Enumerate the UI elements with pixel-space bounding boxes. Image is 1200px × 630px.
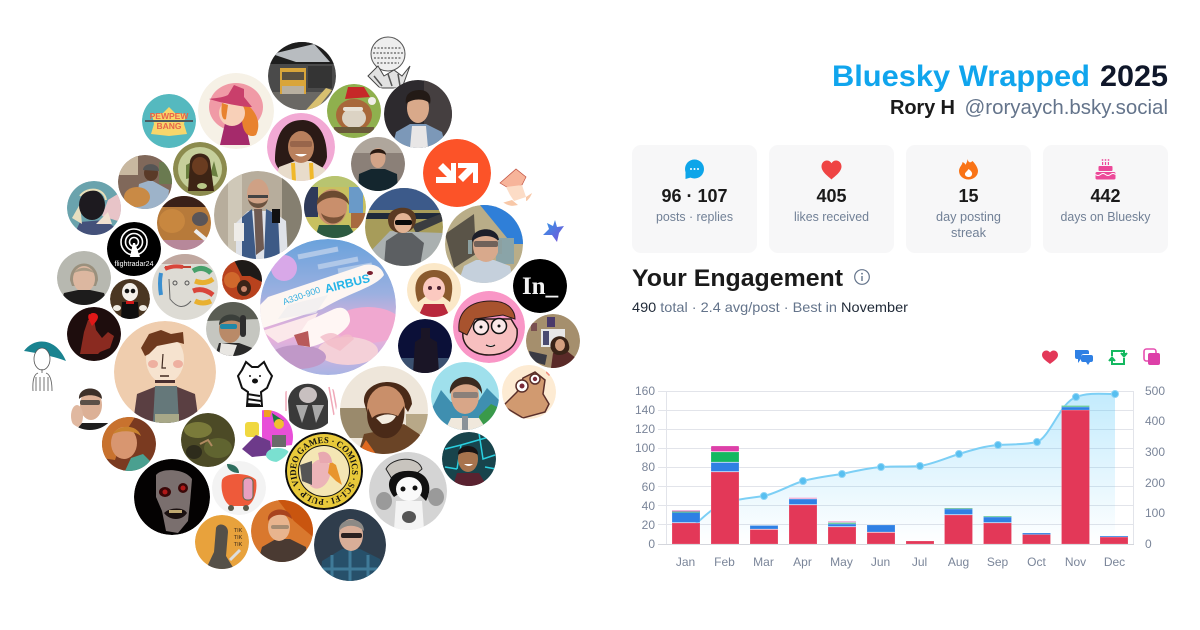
icon: birthday cake: [1096, 159, 1116, 180]
bar: Dec: [1100, 536, 1128, 544]
avatar: large Airbus plane: A330-900: [281, 285, 322, 307]
avatar: anime girl with brown curls: [407, 263, 461, 317]
avatar: smiling bearded man: [304, 176, 366, 238]
avatar: man against teal grid: [442, 432, 496, 486]
avatar: sketch with colourful candy hair: [152, 254, 218, 320]
stat card: likes received: likes received: [794, 209, 869, 224]
avatar: line art tiger: [238, 362, 272, 406]
icon: heart: [822, 160, 842, 180]
avatar: bald man in vest: [214, 171, 302, 259]
engagement summary: 490 total · 2.4 avg/post · Best in November: [632, 299, 908, 315]
avatar: orange arrows logo: [423, 139, 491, 207]
avatar: forest aerial: [181, 413, 235, 467]
avatar: blue star: [543, 220, 564, 242]
stat card: likes received: 405: [816, 186, 847, 206]
month labels: May: [830, 555, 853, 569]
avatar: pewpew bang logo: [142, 94, 196, 148]
avatar: horror face: [134, 459, 210, 535]
avatar: orange horror illustration: [195, 515, 249, 569]
avatar: red-haired illustrated man: [251, 500, 313, 562]
stat card: day posting streak: streak: [951, 225, 986, 240]
right axis labels: 0: [1145, 537, 1152, 551]
avatar: colourful pixel art: [239, 410, 293, 464]
avatar: orange horror illustration: TIK: [234, 528, 243, 534]
avatar: In_ logo: [513, 259, 567, 313]
stat card: posts and replies: 96 · 107: [661, 186, 728, 206]
bar: Jan: [672, 510, 700, 544]
bar: Jul: [906, 541, 934, 544]
month labels: Nov: [1065, 555, 1086, 569]
stat card: days on Bluesky: 442: [1090, 186, 1121, 206]
stat card: posts and replies: [632, 145, 757, 253]
avatar: mushroom-hat line figure: [24, 342, 66, 391]
avatar: blonde person: [57, 251, 111, 305]
right axis labels: [1145, 384, 1165, 551]
avatar: man with glasses and mic: [431, 362, 499, 430]
bar: Feb: [711, 446, 739, 544]
stat card: posts and replies: posts · replies: [656, 209, 733, 224]
avatar: flightradar24 logo: flightradar24: [115, 261, 154, 268]
icon: info: [855, 270, 869, 284]
cumulative line: [682, 390, 1118, 536]
avatar: yellow train at station: [268, 42, 336, 110]
month labels: Apr: [793, 555, 812, 569]
avatar: man in plaid shirt: [314, 509, 386, 581]
avatar: dark silhouette man: [398, 319, 452, 373]
avatar: apple vehicle: [212, 461, 266, 515]
avatar: pilot with blue sunglasses: [206, 302, 260, 356]
title: Bluesky Wrapped 2025: 2025: [1100, 60, 1168, 93]
left axis labels: 0: [648, 537, 655, 551]
stat card: day posting streak: 15: [958, 186, 979, 206]
avatar: pewpew bang logo: BANG: [156, 121, 182, 131]
avatar: grey manga figure: [285, 384, 337, 430]
right axis labels: 400: [1145, 414, 1165, 428]
month labels: Jul: [912, 555, 927, 569]
left axis labels: 60: [642, 480, 655, 494]
icon: reposts arrows: [1109, 351, 1127, 364]
avatar: pink-eyed creature: [502, 365, 556, 419]
avatar: large Airbus plane: AIRBUS: [323, 271, 371, 296]
avatar: red dog with heart: [67, 307, 121, 361]
avatar: man in cockpit: [445, 205, 523, 283]
avatar: man outdoors: [351, 137, 405, 191]
stat card: likes received: [769, 145, 894, 253]
avatar: flightradar24 logo: [107, 222, 161, 276]
left axis labels: 160: [635, 384, 655, 398]
bar: Sep: [984, 516, 1012, 544]
stat card: days on Bluesky: days on Bluesky: [1060, 209, 1151, 224]
month labels: Jun: [871, 555, 890, 569]
avatar: smiling man with dark beard: [340, 366, 428, 454]
engagement chart: [635, 384, 1165, 569]
avatar: pulp seal: PULP · VIDEO GAMES · COMICS · SCI-FI ·: [290, 437, 358, 505]
avatar: man in blue suit: [384, 80, 452, 148]
avatar: pewpew bang logo: PEWPEW: [150, 111, 189, 121]
avatar: pink cartoon with glasses: [453, 291, 525, 363]
right axis labels: 300: [1145, 445, 1165, 459]
month labels: [676, 555, 1125, 569]
left axis labels: 140: [635, 403, 655, 417]
icon: likes heart: [1042, 350, 1058, 364]
title: Bluesky Wrapped 2025: Bluesky Wrapped: [832, 60, 1090, 93]
icon: flame: [959, 159, 978, 180]
month labels: Jan: [676, 555, 695, 569]
avatar: witch illustration: [198, 73, 274, 149]
month labels: Aug: [948, 555, 969, 569]
avatar: In_ logo: In_: [522, 273, 559, 300]
left axis labels: [635, 384, 655, 551]
avatar: man holding dog: [118, 155, 173, 209]
month labels: Sep: [987, 555, 1008, 569]
bar: Nov: [1062, 406, 1090, 544]
stat card: day posting streak: [906, 145, 1031, 253]
avatar: woman by plane: [365, 188, 443, 266]
avatar: sleeping golden dog: [157, 196, 211, 250]
avatar: cartoon man with brown hair: [114, 321, 216, 423]
avatar: peach sketch character: [500, 168, 532, 206]
bar: Aug: [944, 508, 972, 544]
avatar: woman on pink: [267, 113, 335, 181]
profile name and handle: Rory H: [890, 97, 955, 119]
bar: Jun: [867, 525, 895, 544]
left axis labels: 80: [642, 460, 655, 474]
avatar: man on the phone: [71, 388, 108, 430]
avatar: plush doll: [110, 279, 150, 319]
avatar: orange horror illustration: TIK: [234, 542, 243, 548]
month labels: Mar: [753, 555, 774, 569]
avatar: woman in studio: [526, 314, 580, 368]
right axis labels: 200: [1145, 476, 1165, 490]
cumulative area: [686, 394, 1115, 544]
avatar: orange horror illustration: TIK: [234, 535, 243, 541]
bar: Apr: [789, 498, 817, 544]
icon: speech bubble: [685, 160, 704, 179]
heading: Your Engagement: Your Engagement: [632, 265, 843, 292]
left axis labels: 20: [642, 518, 655, 532]
avatar: pastel shadow figure: [67, 181, 121, 235]
avatar: manga girl: [369, 452, 447, 530]
left axis labels: 120: [635, 422, 655, 436]
month labels: Feb: [714, 555, 735, 569]
avatar: brown character with green badge: [173, 142, 227, 196]
right axis labels: 100: [1145, 506, 1165, 520]
month labels: Dec: [1104, 555, 1125, 569]
left axis labels: 100: [635, 441, 655, 455]
avatar: red-haired woman: [102, 417, 156, 471]
stacked bars: [672, 406, 1128, 544]
icon: replies bubbles: [1075, 350, 1093, 365]
avatar cluster: [24, 36, 580, 581]
stat card: day posting streak: day posting: [936, 209, 1001, 224]
avatar: ink sketch: [367, 36, 410, 88]
avatar: plush with santa hat: [327, 84, 381, 138]
legend icons: [1042, 349, 1160, 365]
bar: Mar: [750, 526, 778, 544]
bar: May: [828, 521, 856, 544]
left axis labels: 40: [642, 499, 655, 513]
icon: quotes squares: [1144, 349, 1160, 365]
avatar: dog close-up on red: [222, 260, 262, 300]
month labels: Oct: [1027, 555, 1046, 569]
stat card: days on Bluesky: [1043, 145, 1168, 253]
bar: Oct: [1022, 533, 1050, 544]
profile name and handle: @roryaych.bsky.social: [964, 97, 1168, 119]
right axis labels: 500: [1145, 384, 1165, 398]
avatar: large Airbus plane: [260, 239, 402, 375]
